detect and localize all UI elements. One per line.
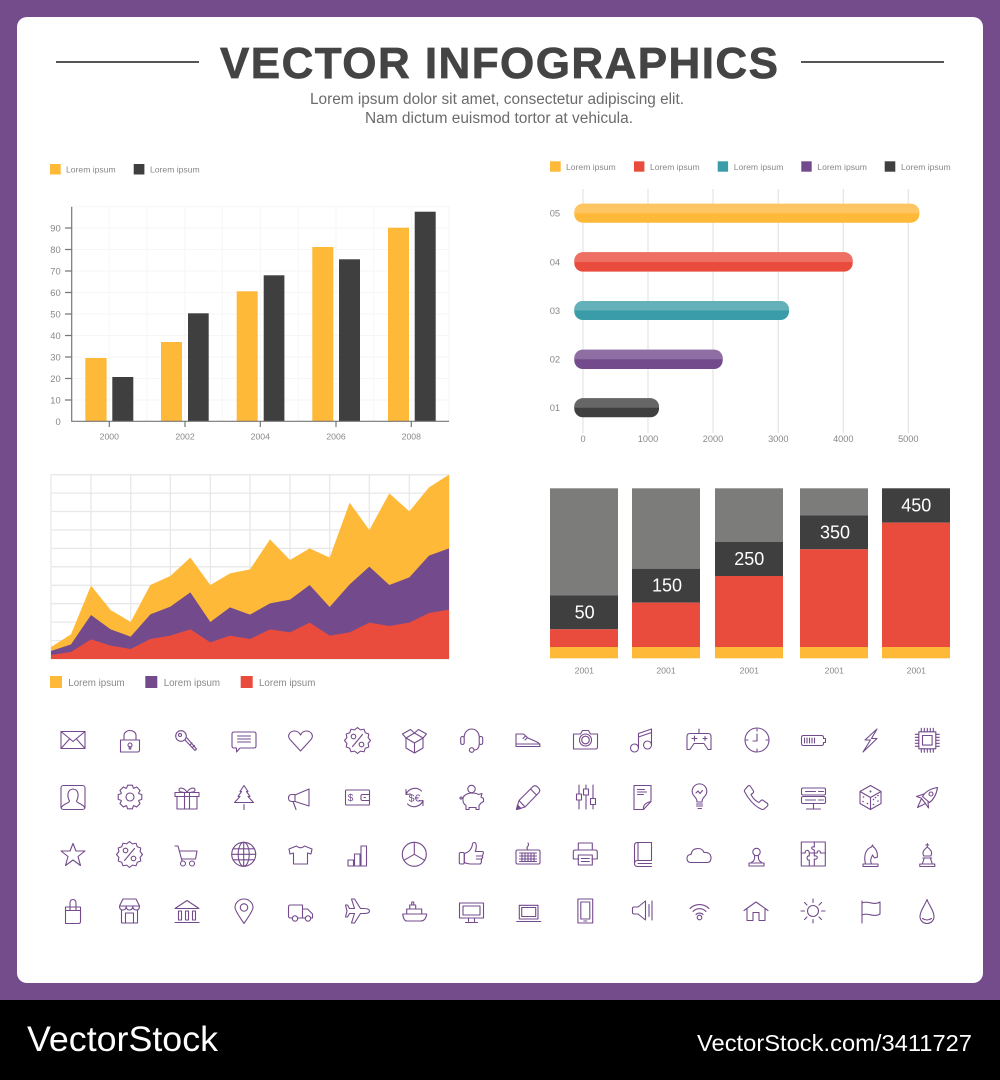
column labels: 2001: [656, 665, 676, 675]
y axis labels: 80: [50, 244, 61, 255]
category labels: 04: [550, 256, 560, 267]
icon: light bulb: [692, 784, 707, 808]
footer bar: VectorStock: [27, 1020, 219, 1059]
icon: currency exchange: $€: [409, 792, 420, 804]
legend: bar chart: Lorem ipsum: [150, 164, 200, 174]
icon: camera: [574, 730, 598, 749]
y axis labels: 70: [50, 266, 61, 276]
icon: shopping cart: [175, 846, 197, 866]
value labels: 3000: [768, 434, 789, 444]
icon: user portrait: [61, 786, 85, 810]
icon: puzzle: [801, 842, 825, 866]
icon: open box: [402, 730, 426, 753]
subtitle: Lorem ipsum dolor sit amet, consectetur adipiscing elit.: [310, 91, 684, 108]
category labels: 03: [550, 305, 560, 316]
icon: sliders: [576, 785, 596, 809]
column labels: 2001: [575, 665, 594, 675]
panel: stacked columns: [550, 488, 950, 675]
icon: percent badge: [344, 728, 370, 754]
icon: clock: [745, 728, 769, 752]
value labels: 5000: [898, 434, 919, 444]
icon: gift: [175, 788, 199, 809]
panel: area chart: [50, 475, 449, 689]
y axis labels: 60: [50, 287, 61, 298]
y axis labels: [50, 222, 61, 427]
legend: horizontal bars: Lorem ipsum: [901, 162, 951, 172]
y axis labels: 30: [50, 352, 61, 362]
axes: [65, 207, 449, 427]
title: VECTOR INFOGRAPHICS: [220, 39, 778, 88]
legend: bar chart: [50, 164, 200, 174]
icon: t-shirt: [289, 846, 312, 864]
column labels: 2001: [825, 665, 844, 675]
legend: horizontal bars: Lorem ipsum: [734, 162, 783, 172]
icon: printer: [573, 843, 597, 865]
category labels: 05: [550, 208, 560, 218]
legend: horizontal bars: [550, 161, 951, 172]
footer bar: VectorStock.com/3411727: [697, 1030, 972, 1056]
y axis labels: 40: [50, 330, 61, 341]
legend: area chart: Lorem ipsum: [259, 678, 315, 689]
y axis labels: 20: [50, 373, 61, 384]
bar 05: [574, 204, 919, 223]
icon: key: [176, 731, 196, 750]
icon: document: [634, 786, 651, 810]
category labels: [550, 208, 560, 413]
icon: speaker: [632, 901, 652, 920]
icon: chess knight: [863, 845, 878, 866]
subtitle: Nam dictum euismod tortor at vehicula.: [365, 110, 633, 127]
legend: area chart: Lorem ipsum: [68, 678, 125, 689]
column 4: 350: [820, 522, 850, 542]
icon: shopping bag: [66, 900, 80, 924]
legend: bar chart: Lorem ipsum: [66, 164, 116, 174]
legend: area chart: Lorem ipsum: [164, 678, 220, 689]
bar 04: [574, 252, 853, 272]
icon: airplane: [346, 899, 370, 923]
icon: house: [744, 902, 768, 920]
panel: vertical bar chart: [50, 164, 449, 441]
x axis labels: 2006: [326, 431, 346, 441]
x axis labels: 2000: [100, 431, 119, 441]
icon: pie chart: [402, 842, 426, 866]
icon: speech bubble: [232, 732, 256, 752]
icon: headset: [461, 729, 483, 752]
icon: pine tree: [234, 786, 254, 810]
x axis labels: [100, 431, 421, 441]
column 4: [800, 488, 868, 658]
column 3: [715, 488, 783, 658]
icon: wallet: $: [348, 793, 354, 804]
icon: shoe: [516, 734, 540, 746]
panel: icon set: [61, 728, 939, 924]
legend: area chart: [50, 676, 315, 689]
y axis labels: 90: [50, 222, 61, 234]
legend: horizontal bars: Lorem ipsum: [817, 162, 867, 172]
icon: wallet: [346, 790, 370, 805]
bar 02: [574, 350, 723, 369]
y axis labels: 50: [50, 308, 61, 320]
icon: piggy bank: [460, 785, 484, 810]
icon: flag: [862, 901, 880, 923]
icon: storefront: [120, 899, 140, 923]
column labels: [575, 665, 926, 675]
icon: telephone: [744, 786, 768, 810]
icon: tablet: [578, 899, 593, 923]
icon: rocket: [916, 788, 938, 808]
bar 01: [574, 398, 659, 417]
column 2: [632, 488, 700, 658]
value labels: [580, 434, 919, 444]
icon: megaphone: [288, 789, 309, 810]
column 2: 150: [652, 576, 682, 596]
icon: keyboard: [516, 843, 540, 864]
icon: battery: [802, 736, 826, 746]
column 5: 450: [901, 496, 931, 516]
icon: laptop: [517, 905, 541, 922]
category labels: 01: [550, 402, 560, 413]
icon: stamp: [749, 848, 764, 866]
icon: music notes: [630, 729, 652, 752]
icon: microchip: [915, 728, 939, 752]
icon: star: [61, 844, 85, 866]
icon: heart: [289, 731, 312, 751]
value labels: 0: [580, 434, 586, 444]
icon: wifi: [690, 905, 709, 920]
value labels: 1000: [638, 434, 658, 444]
icon: cloud: [687, 848, 711, 862]
column 1: [550, 488, 618, 658]
bar 03: [574, 301, 789, 320]
column 1: 50: [575, 603, 595, 623]
icon: dice: [860, 786, 881, 810]
areas: [51, 475, 449, 659]
icon: lightning bolt: [863, 729, 877, 752]
icon: padlock: [120, 730, 140, 752]
icon: sun: [801, 899, 825, 923]
column 3: 250: [734, 549, 764, 569]
icon: water drop: [920, 900, 934, 924]
x axis labels: 2004: [251, 431, 270, 441]
icon: envelope: [61, 732, 85, 748]
legend: horizontal bars: Lorem ipsum: [566, 162, 616, 172]
value labels: 4000: [833, 434, 854, 444]
icon: bank: [175, 900, 199, 922]
icon: monitor: [460, 903, 484, 922]
icon: bar graph: [348, 846, 366, 866]
icon: map pin: [235, 899, 253, 924]
column labels: 2001: [740, 665, 759, 675]
icon: server: [802, 788, 826, 809]
x axis labels: 2008: [402, 431, 421, 441]
icon: percent badge 2: [116, 842, 142, 868]
icon: gear: [118, 785, 142, 809]
x axis labels: 2002: [175, 431, 195, 441]
y axis labels: 10: [50, 394, 61, 406]
icon: book: [634, 842, 652, 866]
icon: gamepad: [687, 729, 711, 750]
icon: delivery truck: [288, 905, 312, 921]
column 5: [882, 488, 950, 658]
value labels: 2000: [703, 434, 723, 444]
icon: thumbs up: [459, 842, 483, 864]
icon: globe: [232, 842, 256, 866]
legend: horizontal bars: Lorem ipsum: [650, 162, 700, 172]
column labels: 2001: [907, 665, 926, 675]
bars: [85, 212, 436, 421]
footer bar: [0, 1000, 1000, 1080]
category labels: 02: [550, 354, 560, 365]
icon: pencil: [516, 786, 540, 810]
panel: horizontal bar chart: [550, 161, 951, 444]
subtitle: [310, 91, 684, 127]
icon: currency exchange: [406, 788, 423, 807]
icon: ship: [403, 902, 427, 921]
icon: chess bishop: [920, 844, 935, 866]
y axis labels: 0: [55, 416, 61, 427]
